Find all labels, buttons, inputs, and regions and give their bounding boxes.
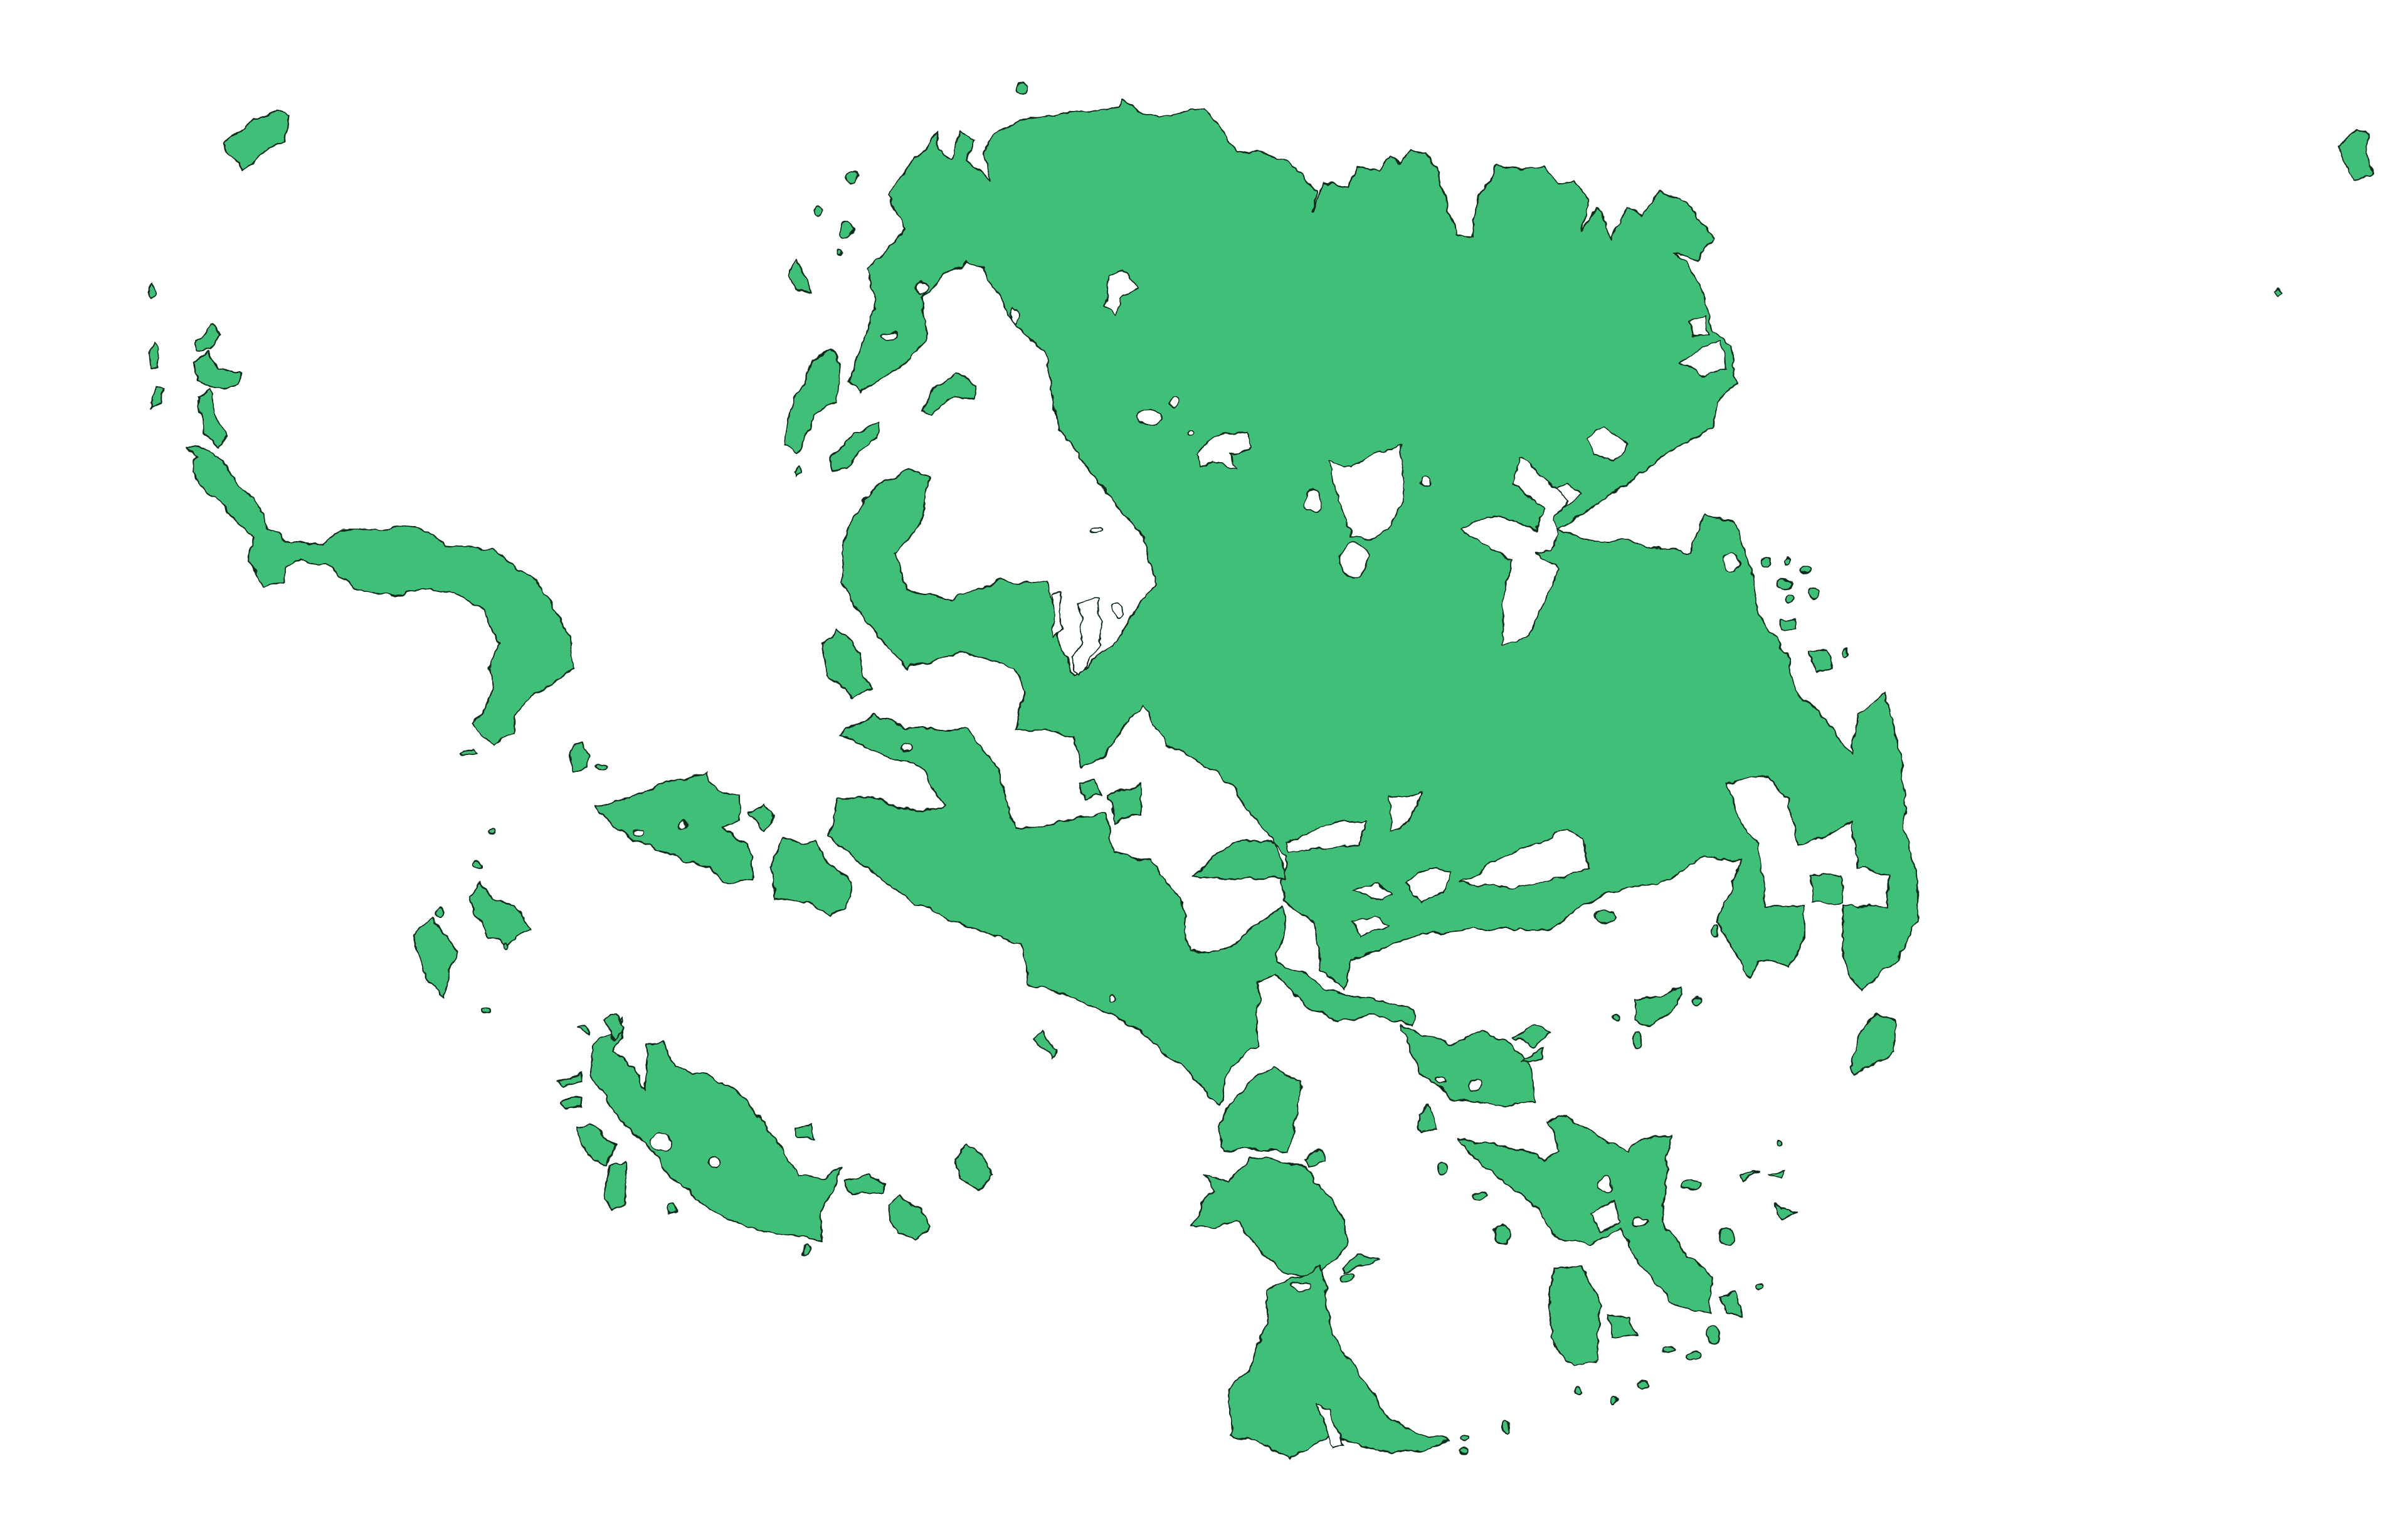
island holes and notches bbox=[633, 745, 1646, 1448]
western arc islands bbox=[147, 110, 605, 771]
south-east islands bbox=[1400, 910, 1896, 1405]
north-east islets bbox=[1761, 127, 2372, 903]
south-central islands bbox=[1190, 1067, 1508, 1458]
inland lakes bbox=[882, 270, 1740, 937]
western mass and peninsula link bbox=[830, 714, 1413, 1105]
main landmass bbox=[842, 98, 1916, 990]
south-west island group bbox=[559, 1013, 929, 1256]
central-west islands bbox=[415, 83, 1287, 1190]
